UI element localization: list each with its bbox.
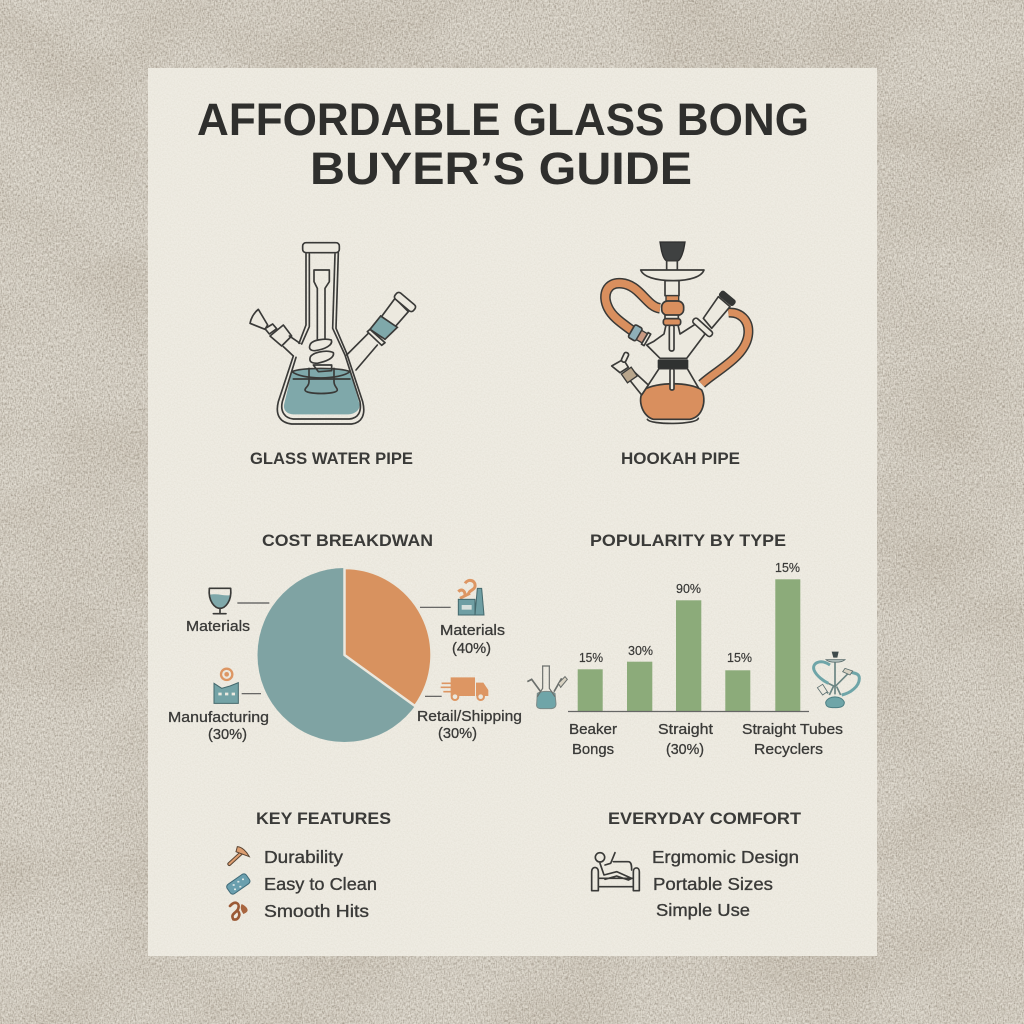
list: everyday comfort: Simple Use: [656, 900, 750, 920]
bar chart: Straight: [658, 721, 714, 738]
list: key features: [226, 847, 377, 921]
pie callout: manufacturing: [168, 669, 269, 743]
illustration: hookah pipe: [605, 242, 748, 423]
list: everyday comfort: [652, 847, 799, 920]
label: glass water pipe: GLASS WATER PIPE: [250, 449, 413, 468]
bar chart: 30%: [628, 643, 653, 658]
icon: hammer: [229, 847, 249, 864]
pie callout: materials right: Materials: [440, 622, 505, 639]
list: key features: Easy to Clean: [264, 874, 377, 894]
title: [197, 94, 809, 194]
heading: key features: KEY FEATURES: [256, 809, 391, 828]
list: everyday comfort: Ergmomic Design: [652, 847, 799, 867]
bar chart: [568, 560, 843, 758]
icon: person on sofa: [592, 853, 639, 891]
pie callout: materials right: (40%): [452, 640, 491, 657]
paper card panel: [148, 68, 877, 956]
heading: popularity by type: POPULARITY BY TYPE: [590, 531, 786, 550]
bar chart: 15%: [727, 650, 752, 665]
bar chart: Beaker: [569, 721, 617, 738]
bar chart: Recyclers: [754, 741, 823, 758]
pie callout: manufacturing: Manufacturing: [168, 709, 269, 726]
title: AFFORDABLE GLASS BONG: [197, 94, 809, 145]
bar chart: 15%: [775, 560, 800, 575]
pie callout: manufacturing: (30%): [208, 726, 247, 743]
pie callout: retail and shipping: (30%): [438, 725, 477, 742]
pie callout: materials left: [186, 588, 269, 635]
pie chart: [258, 568, 432, 742]
pie callout: retail and shipping: [417, 677, 522, 742]
icon: smooth swirl: [230, 903, 248, 920]
list: key features: Durability: [264, 847, 343, 867]
bar chart: 15%: [579, 650, 603, 665]
illustration: glass water pipe: [250, 243, 417, 424]
bar chart: 90%: [676, 581, 701, 596]
list: everyday comfort: Portable Sizes: [653, 874, 773, 894]
icon: mini beaker bong: [527, 666, 567, 709]
heading: cost breakdown: COST BREAKDWAN: [262, 531, 433, 550]
pie callout: retail and shipping: Retail/Shipping: [417, 708, 522, 725]
icon: mini hookah: [814, 652, 859, 708]
bar chart: Straight Tubes: [742, 721, 843, 738]
icon: sponge: [226, 873, 251, 895]
label: hookah pipe: HOOKAH PIPE: [621, 449, 740, 468]
list: key features: Smooth Hits: [264, 901, 369, 921]
pie callout: materials left: Materials: [186, 618, 250, 635]
bar chart: (30%): [666, 741, 704, 758]
pie callout: materials right: [420, 580, 505, 657]
bar chart: Bongs: [572, 741, 614, 758]
title: BUYER’S GUIDE: [310, 143, 692, 194]
heading: everyday comfort: EVERYDAY COMFORT: [608, 809, 802, 828]
